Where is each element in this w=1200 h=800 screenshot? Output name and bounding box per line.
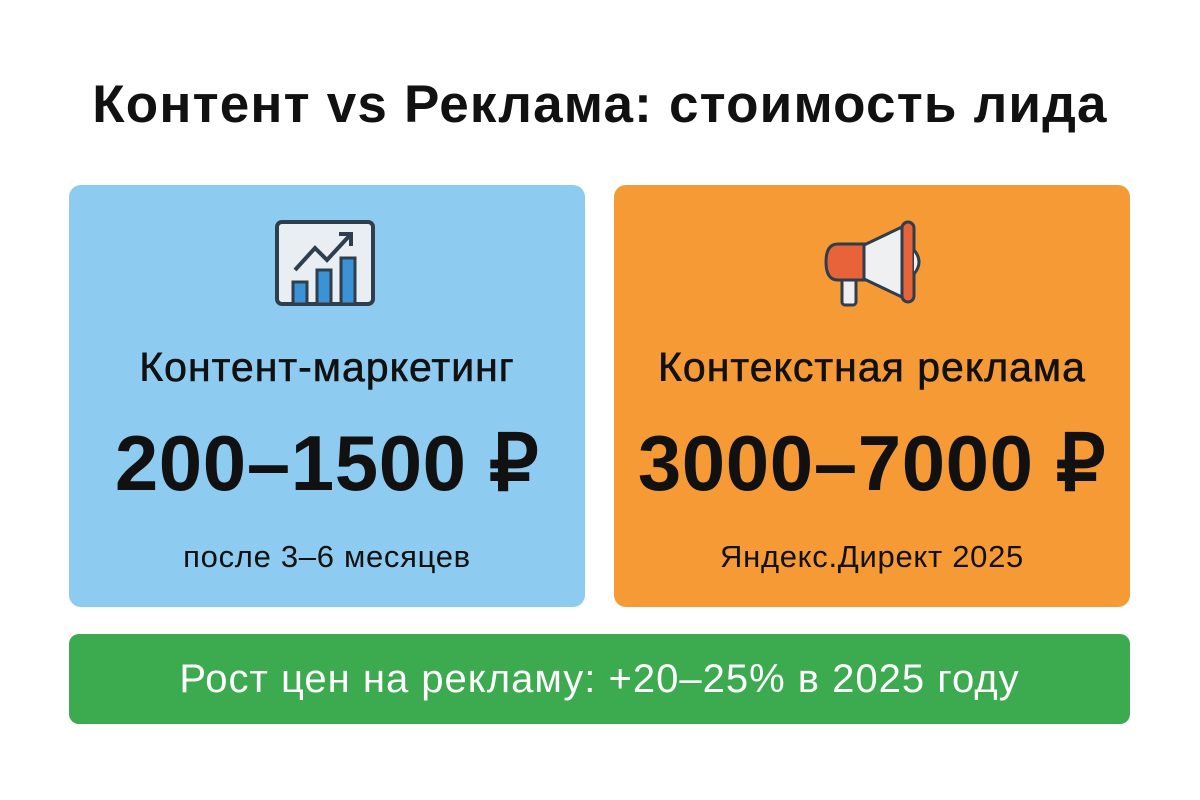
title: Контент vs Реклама: стоимость лида	[92, 75, 1108, 134]
heading: Контент-маркетинг	[139, 344, 515, 390]
note: после 3–6 месяцев	[183, 539, 471, 574]
panel: content marketing	[69, 185, 585, 607]
value: 200–1500 ₽	[115, 419, 539, 507]
value: 3000–7000 ₽	[638, 419, 1106, 507]
icon: megaphone	[824, 220, 921, 306]
heading: Контекстная реклама	[658, 344, 1086, 390]
panel: context ads	[614, 185, 1130, 607]
banner: price growth	[69, 634, 1130, 724]
note: Яндекс.Директ 2025	[720, 539, 1024, 574]
banner: price growth: Рост цен на рекламу: +20–25% в 2025 году	[179, 657, 1020, 701]
icon: growth chart	[275, 220, 375, 306]
